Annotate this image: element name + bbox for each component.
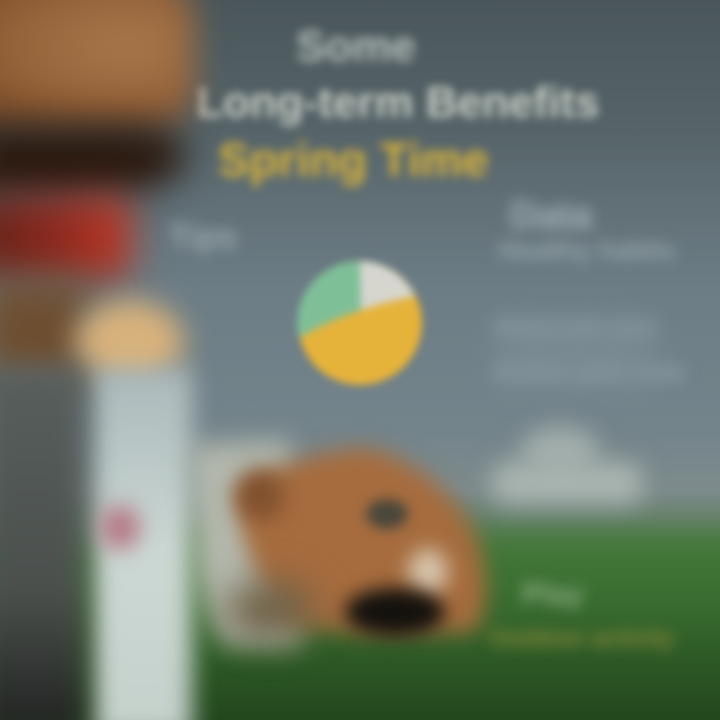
person: red scarf [0,195,132,280]
pie chart [293,256,428,390]
dog: white fur [190,440,300,645]
right label block top: Healthy habits [498,235,676,265]
person: hat shadow [0,125,185,197]
subtitle: Spring Time [218,133,489,186]
person: shirt [92,368,192,720]
person: shoulder [76,300,184,385]
lower caption: Outdoor activity [490,625,674,652]
dog: muzzle [408,548,448,596]
dog: eye [366,499,408,529]
person: neck [0,280,90,380]
lower label: Play [522,578,584,611]
title line two: Long-term Benefits [196,78,599,127]
person: hat [0,0,195,132]
right label block middle: Seasonal care [494,314,655,341]
right label block top [496,195,676,265]
title line one: Some [296,22,416,71]
dog: dark ear [236,469,284,521]
right label block lower [483,416,651,518]
right label block middle: Active pets now [494,358,684,386]
right label block top: Data [510,195,592,237]
dog: nose [345,588,445,636]
dog: brown head [238,448,486,635]
dog: lower cheek shade [225,580,315,640]
right label block middle [493,314,684,386]
dog [188,427,500,666]
shirt red mark [100,505,140,550]
left label: Tips [168,218,237,256]
person: dark side [0,368,85,720]
grass field [180,535,720,720]
